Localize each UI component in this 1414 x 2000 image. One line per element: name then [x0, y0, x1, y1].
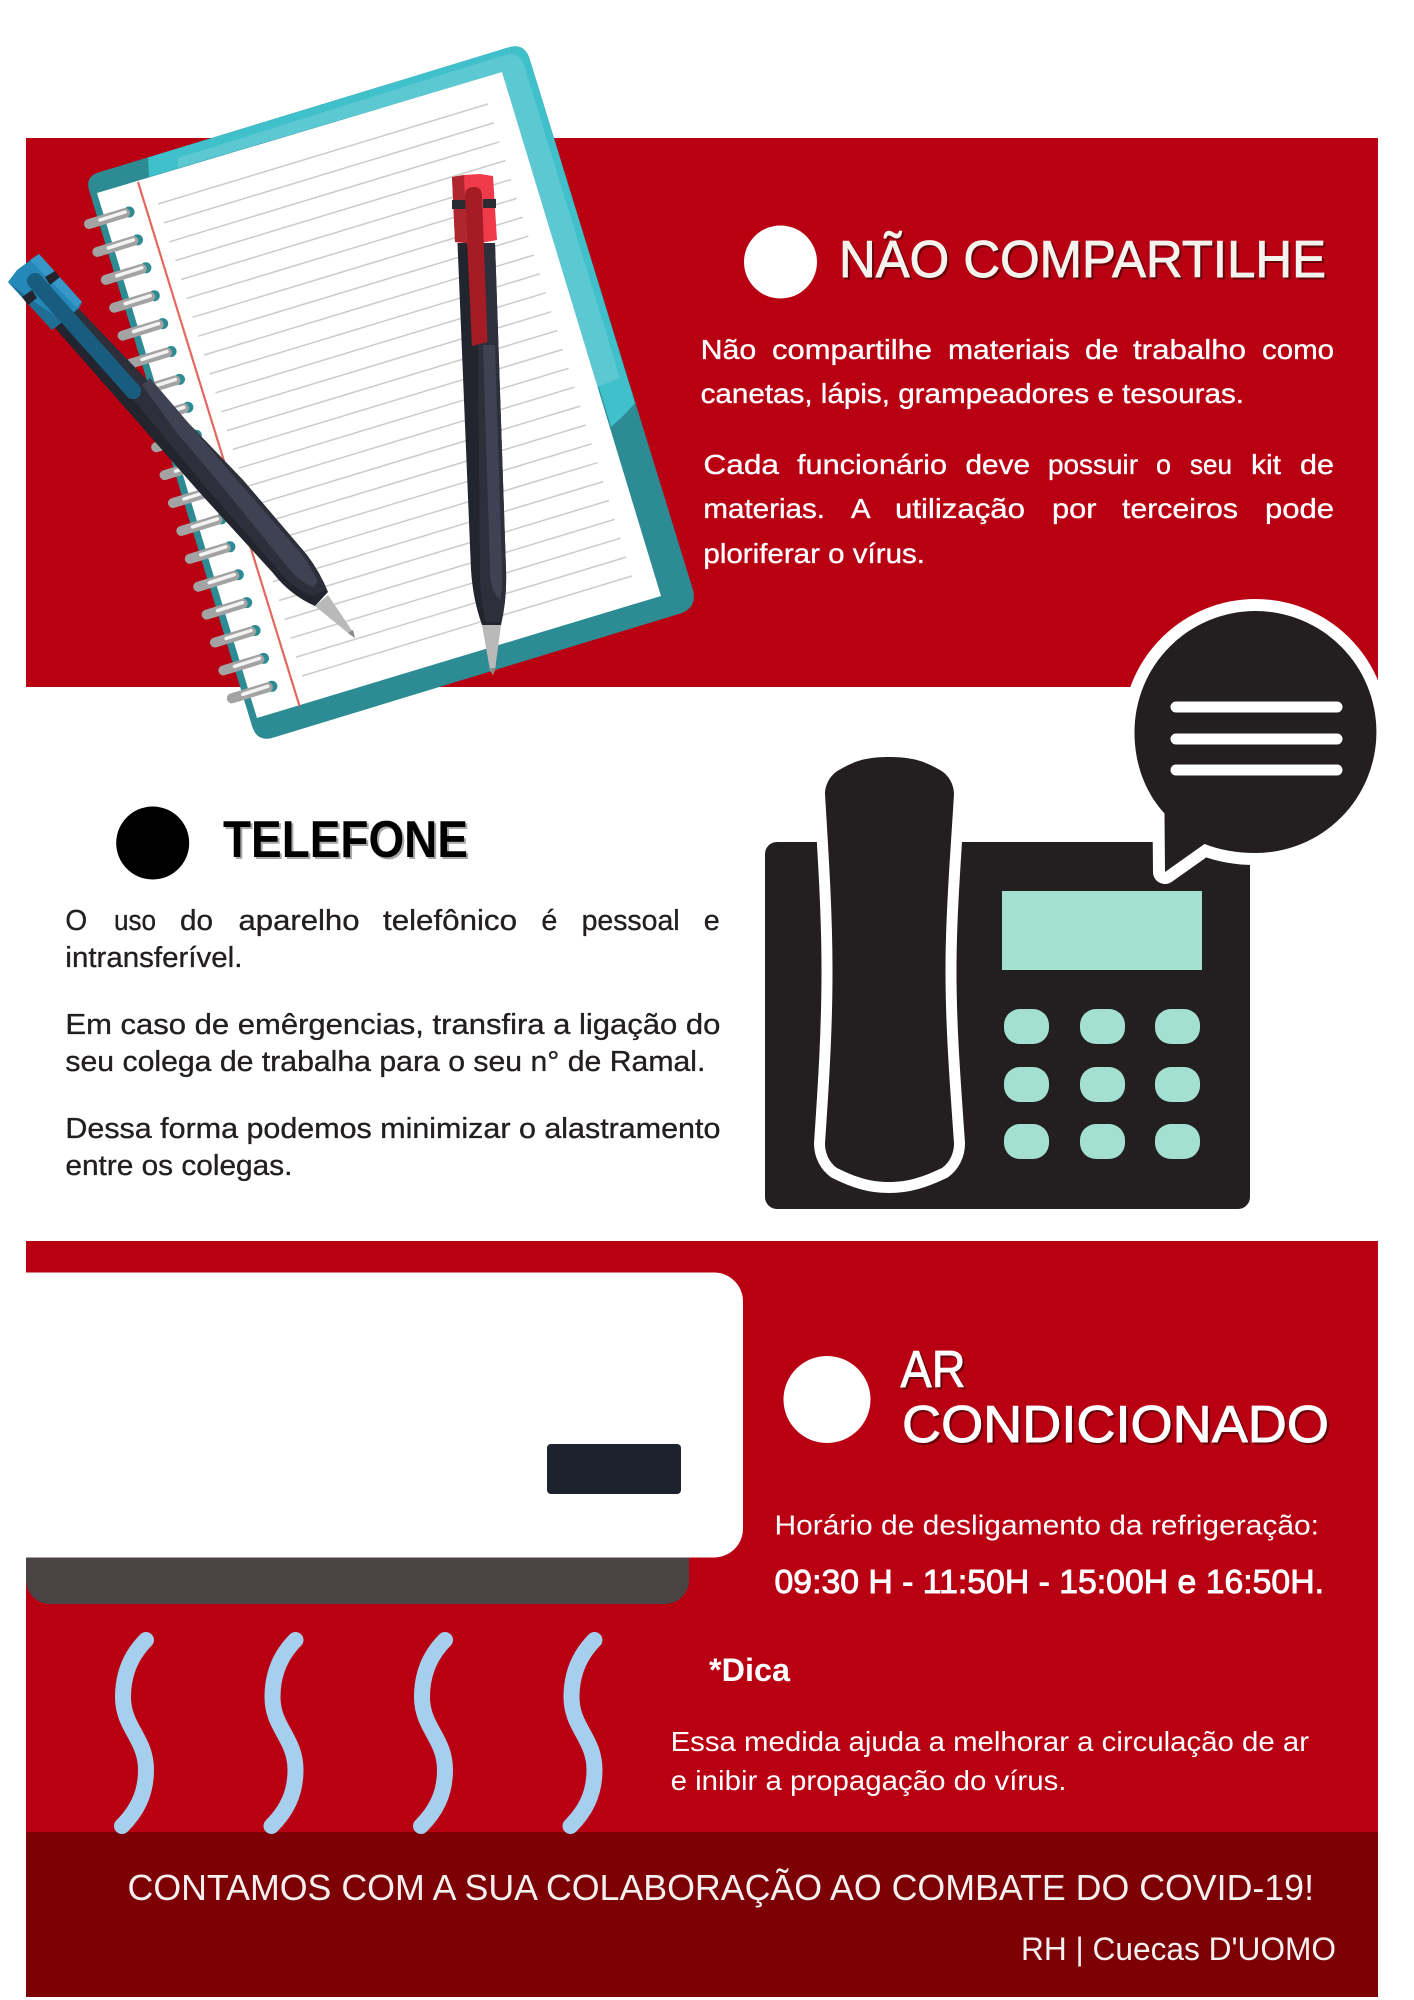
heading: ar condicionado: AR	[900, 1341, 966, 1399]
text block: telefone paragraph 1: telefônico	[383, 905, 517, 937]
telephone body	[765, 842, 1250, 1209]
text block: telefone paragraph 2: Em caso de emêrgencias, transfira a ligação do	[65, 1009, 720, 1041]
text: shutdown schedule label: Horário de desligamento da refrigeração:	[774, 1510, 1319, 1540]
keypad	[1004, 1009, 1200, 1159]
panel: bottom red band	[26, 1241, 1378, 1833]
text block: telefone paragraph 2: seu colega de trabalha para o seu n° de Ramal.	[65, 1046, 705, 1078]
text block: não compartilhe paragraph 2: utilização	[895, 493, 1025, 524]
text block: não compartilhe paragraph 2: possuir	[1048, 449, 1138, 480]
text block: não compartilhe paragraph 2: deve	[966, 449, 1030, 480]
text block: tip: e inibir a propagação do vírus.	[671, 1765, 1066, 1796]
heading: não compartilhe: NÃO COMPARTILHE	[839, 231, 1326, 289]
text block: telefone paragraph 3: entre os colegas.	[65, 1150, 292, 1182]
text block: não compartilhe paragraph 2: de	[1300, 449, 1334, 480]
text block: não compartilhe paragraph 1	[701, 334, 1334, 409]
notebook cover	[88, 46, 694, 739]
text block: não compartilhe paragraph 2: seu	[1190, 449, 1232, 480]
blue pen	[8, 254, 355, 638]
text block: telefone paragraph 1: uso	[114, 905, 156, 937]
icon: section marker circle	[744, 226, 817, 298]
text block: telefone paragraph 1: aparelho	[238, 905, 360, 937]
footer: signature: RH | Cuecas D'UOMO	[1021, 1931, 1336, 1967]
text block: não compartilhe paragraph 2: terceiros	[1122, 493, 1238, 524]
text block: não compartilhe paragraph 1: trabalho	[1133, 334, 1246, 365]
text block: telefone paragraph 2	[65, 1009, 720, 1078]
text block: não compartilhe paragraph 2: Cada	[703, 449, 779, 480]
lower vent	[26, 1540, 689, 1604]
icon: air flow waves	[122, 1640, 594, 1826]
text block: não compartilhe paragraph 1: como	[1262, 334, 1334, 365]
text block: telefone paragraph 1: e	[704, 905, 720, 937]
text block: não compartilhe paragraph 1: compartilhe	[772, 334, 932, 365]
text block: tip: Essa medida ajuda a melhorar a circulação de ar	[671, 1726, 1309, 1757]
page rules	[158, 104, 632, 676]
icon: air conditioner	[26, 1272, 743, 1604]
icon: section marker circle	[784, 1356, 870, 1443]
text block: telefone paragraph 1: intransferível.	[65, 942, 242, 974]
notebook page	[97, 72, 661, 718]
text block: telefone paragraph 1: pessoal	[582, 905, 680, 937]
text block: telefone paragraph 1	[65, 905, 720, 974]
icon: speech bubble	[1134, 611, 1376, 872]
spiral binding	[89, 212, 272, 698]
text: tip heading: *Dica	[709, 1652, 790, 1688]
footer: call to action: CONTAMOS COM A SUA COLABORAÇÃO AO COMBATE DO COVID-19!	[128, 1867, 1314, 1908]
text block: não compartilhe paragraph 2: A	[851, 493, 871, 524]
text block: não compartilhe paragraph 1: de	[1085, 334, 1118, 365]
text block: telefone paragraph 3	[65, 1113, 720, 1182]
icon: section marker circle	[116, 806, 189, 880]
text block: não compartilhe paragraph 2: funcionário	[797, 449, 947, 480]
panel: footer band	[26, 1832, 1378, 1997]
display	[547, 1444, 681, 1494]
text block: não compartilhe paragraph 2: pode	[1265, 493, 1334, 524]
text block: telefone paragraph 1: é	[541, 905, 557, 937]
bubble text lines	[1176, 707, 1337, 770]
text block: não compartilhe paragraph 2: kit	[1251, 449, 1281, 480]
text block: não compartilhe paragraph 2	[703, 449, 1334, 569]
icon: telephone	[765, 757, 1250, 1209]
icon: notebook with pens	[8, 46, 694, 739]
heading: ar condicionado	[900, 1341, 1329, 1454]
text block: não compartilhe paragraph 2: materias.	[703, 493, 825, 524]
text block: não compartilhe paragraph 1: Não	[701, 334, 756, 365]
screen	[1002, 891, 1202, 970]
text block: não compartilhe paragraph 2: ploriferar o vírus.	[703, 538, 925, 569]
red pen	[452, 174, 506, 675]
text block: não compartilhe paragraph 2: por	[1052, 493, 1096, 524]
heading: ar condicionado: CONDICIONADO	[902, 1396, 1329, 1454]
text block: telefone paragraph 1: do	[180, 905, 213, 937]
text block: não compartilhe paragraph 1: materiais	[948, 334, 1070, 365]
panel: top red band	[26, 138, 1378, 687]
text block: tip	[671, 1726, 1309, 1796]
page margin line	[138, 182, 300, 706]
text block: não compartilhe paragraph 1: canetas, lápis, grampeadores e tesouras.	[701, 378, 1244, 409]
text block: não compartilhe paragraph 2: o	[1156, 449, 1171, 480]
text block: telefone paragraph 1: O	[65, 905, 87, 937]
unit body	[26, 1272, 743, 1558]
text: shutdown times: 09:30 H - 11:50H - 15:00H e 16:50H.	[774, 1563, 1324, 1600]
handset	[825, 757, 954, 1182]
text block: telefone paragraph 3: Dessa forma podemos minimizar o alastramento	[65, 1113, 720, 1145]
heading: telefone: TELEFONE	[223, 811, 468, 869]
